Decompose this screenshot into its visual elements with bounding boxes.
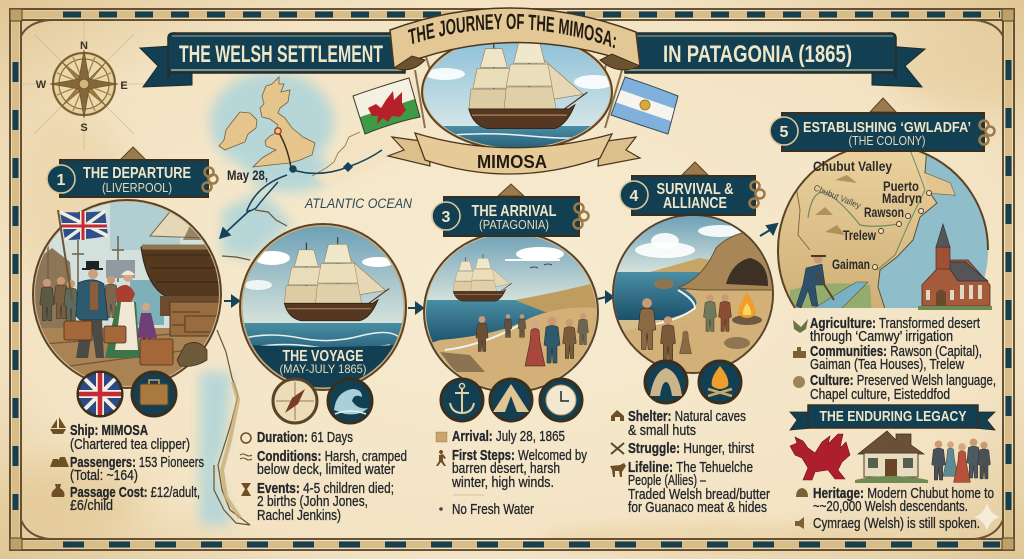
Atlantic Ocean label: ATLANTIC OCEAN xyxy=(304,196,412,211)
icon: cave xyxy=(645,361,687,403)
scene: barren beach xyxy=(424,230,600,395)
title ribbon right xyxy=(625,33,925,87)
step 4 banner: ALLIANCE xyxy=(663,195,727,212)
text: departure facts: Ship: MIMOSA xyxy=(70,423,148,439)
illustration: Welsh house xyxy=(855,431,928,483)
step 3 banner xyxy=(432,184,588,236)
text: departure facts: (Total: ~164) xyxy=(70,468,138,484)
illustration: choir xyxy=(932,439,990,482)
icon: hut glyph xyxy=(611,410,624,421)
watermark sparkle xyxy=(974,503,1000,531)
text: departure facts: (Chartered tea clipper) xyxy=(70,437,190,453)
distant land to the east xyxy=(312,128,410,186)
text: survival facts: for Guanaco meat & hides xyxy=(628,500,767,516)
icon: crossed tools glyph xyxy=(611,443,624,454)
icon: buildings glyph xyxy=(793,347,806,358)
icon: anchor xyxy=(441,379,483,421)
illustration: Welsh dragon xyxy=(790,434,850,480)
text: departure facts: Passage Cost: £12/adult, xyxy=(70,485,200,501)
text: colony facts: through ‘Camwy’ irrigation xyxy=(810,329,953,345)
icon: compass rose: E xyxy=(120,80,128,92)
flag: Wales xyxy=(352,70,426,135)
scene: Liverpool docks xyxy=(30,200,230,390)
panel 3: the arrival xyxy=(424,184,600,518)
step 3 banner: (PATAGONIA) xyxy=(479,218,549,232)
icon: wave xyxy=(328,379,372,423)
step 1 banner: THE DEPARTURE xyxy=(83,165,191,182)
icon: suitcase xyxy=(132,372,176,416)
text: voyage facts: Rachel Jenkins) xyxy=(257,508,341,524)
text: survival facts: People (Allies) – xyxy=(628,473,707,489)
map place labels xyxy=(812,159,932,272)
icon: leaf glyph xyxy=(793,319,808,333)
step 3 banner: 3 xyxy=(442,209,451,226)
icon: ship glyph xyxy=(50,417,66,434)
text: survival facts: Traded Welsh bread/butter xyxy=(628,487,770,503)
text: departure facts xyxy=(50,417,204,514)
text: survival facts: Lifeline: The Tehuelche xyxy=(628,460,753,476)
text: voyage facts: Duration: 61 Days xyxy=(257,430,353,446)
Liverpool marker xyxy=(275,128,281,134)
text: arrival facts: First Steps: Welcomed by xyxy=(452,448,588,464)
icon: compass rose: S xyxy=(80,122,88,134)
icon: compass rose xyxy=(22,22,146,150)
icon: calendar glyph xyxy=(436,432,447,442)
text: survival facts xyxy=(610,409,770,516)
icon: guanaco glyph xyxy=(610,463,626,477)
arrow: step 2 to 3 xyxy=(408,303,423,313)
icon: tent xyxy=(490,379,532,421)
panel 2: the voyage xyxy=(235,224,411,524)
text: voyage facts: below deck, limited water xyxy=(257,462,395,478)
panel 4: survival and alliance xyxy=(610,162,780,516)
icon: speaker glyph xyxy=(795,517,804,529)
text: legacy facts: ~~20,000 Welsh descendants. xyxy=(813,499,968,515)
ribbon: The Enduring Legacy xyxy=(790,405,995,430)
South America coastline xyxy=(214,210,287,525)
icon: heritage dome glyph xyxy=(796,488,808,497)
ribbon: MIMOSA: MIMOSA xyxy=(477,152,547,172)
step 5 banner: ESTABLISHING ‘GWLADFA’ xyxy=(803,120,971,136)
Union flag on pole xyxy=(58,210,72,300)
icon: money bag glyph xyxy=(52,484,64,497)
text: voyage facts: Events: 4-5 children died; xyxy=(257,481,394,497)
text: colony facts: Gaiman (Tea Houses), Trelew xyxy=(810,357,964,373)
voyage label: (MAY-JULY 1865) xyxy=(280,362,367,376)
step 4 banner: 4 xyxy=(630,188,639,205)
ribbon: MIMOSA xyxy=(388,133,640,174)
icon: hourglass glyph xyxy=(241,483,251,496)
text: arrival facts: barren desert, harsh xyxy=(452,461,560,477)
scene: ship at sea xyxy=(235,224,411,395)
step 4 banner xyxy=(620,162,764,215)
central medallion: the Mimosa xyxy=(421,43,613,148)
text: survival facts: Struggle: Hunger, thirst xyxy=(628,441,754,457)
map: Atlantic and continents xyxy=(200,72,412,525)
map place labels: Rawson xyxy=(864,205,904,220)
ribbon: The Enduring Legacy: THE ENDURING LEGACY xyxy=(820,408,966,425)
text: arrival facts: No Fresh Water xyxy=(452,502,534,518)
map place labels: Chubut Valley xyxy=(813,159,892,174)
icon: harp medallion glyph xyxy=(793,376,805,388)
text: voyage facts: Conditions: Harsh, cramped xyxy=(257,449,407,465)
Ireland xyxy=(219,112,257,150)
icon: passengers glyph xyxy=(50,457,69,467)
voyage label xyxy=(280,348,367,376)
ship at quay xyxy=(149,212,200,238)
woman in shawl xyxy=(105,270,140,358)
icon: waves glyph xyxy=(240,454,252,460)
icon: walker glyph xyxy=(436,450,446,466)
child xyxy=(137,303,157,350)
step 5 banner: (THE COLONY) xyxy=(848,134,926,148)
text: arrival facts: winter, high winds. xyxy=(451,475,554,491)
text: voyage facts: 2 births (John Jones, xyxy=(257,494,368,510)
scene: Chubut map with farmer and chapel xyxy=(777,152,992,310)
voyage label: THE VOYAGE xyxy=(282,348,364,365)
panel 1: the departure xyxy=(30,147,230,514)
map place labels: Puerto xyxy=(883,179,919,194)
icon: compass xyxy=(273,379,317,423)
luggage xyxy=(64,321,207,366)
text: colony facts xyxy=(793,316,996,403)
arrow: step 3 to 4 xyxy=(598,292,613,302)
text: colony facts: Communities: Rawson (Capital), xyxy=(810,344,982,360)
scene: cave and campfire xyxy=(612,214,780,375)
panel 5: establishing Gwladfa xyxy=(770,98,1000,532)
text: colony facts: Agriculture: Transformed desert xyxy=(810,316,980,332)
text: arrival facts: Arrival: July 28, 1865 xyxy=(452,429,565,445)
text: survival facts: Shelter: Natural caves xyxy=(628,409,746,425)
banner: The Journey of the Mimosa xyxy=(389,7,641,70)
text: departure facts: Passengers: 153 Pioneers xyxy=(70,455,204,471)
man with top hat xyxy=(76,261,108,358)
step 5 banner: 5 xyxy=(780,124,789,141)
farmer xyxy=(796,254,834,308)
icon: campfire xyxy=(699,361,741,403)
ocean wash around British Isles xyxy=(200,72,334,525)
text: legacy facts: Heritage: Modern Chubut home to xyxy=(813,486,994,502)
text: colony facts: Chapel culture, Eisteddfod xyxy=(810,387,950,403)
text: arrival facts xyxy=(436,429,588,518)
map place labels: Trelew xyxy=(843,228,876,243)
text: legacy facts: Cymraeg (Welsh) is still spoken. xyxy=(813,516,980,532)
chapel xyxy=(918,224,992,310)
crowd xyxy=(40,276,118,322)
banner: The Journey of the Mimosa: THE JOURNEY OF THE MIMOSA: xyxy=(408,14,616,48)
text: voyage facts xyxy=(240,430,407,524)
step 4 banner: SURVIVAL & xyxy=(656,181,734,198)
icon: compass rose: N xyxy=(80,40,88,52)
step 1 banner: (LIVERPOOL) xyxy=(102,181,172,195)
step 1 banner: 1 xyxy=(57,172,66,189)
step 5 banner xyxy=(770,98,994,151)
title ribbon left: THE WELSH SETTLEMENT xyxy=(179,41,383,68)
arrow: step 4 to 5 xyxy=(760,224,777,236)
text: legacy facts xyxy=(795,486,994,532)
map place labels: Madryn xyxy=(882,191,922,206)
Great Britain xyxy=(253,77,315,167)
text: departure facts: £6/child xyxy=(70,498,113,514)
step 3 banner: THE ARRIVAL xyxy=(472,203,556,220)
title ribbon right: IN PATAGONIA (1865) xyxy=(663,41,852,68)
arrow: step 1 to 2 xyxy=(224,296,239,306)
icon: stopwatch glyph xyxy=(241,433,251,443)
date label: May 28, xyxy=(227,168,268,183)
step 1 banner xyxy=(47,147,218,197)
title ribbon left xyxy=(140,33,405,87)
text: survival facts: & small huts xyxy=(628,423,696,439)
icon: clock xyxy=(540,379,582,421)
map place labels: Gaiman xyxy=(832,257,870,272)
icon: union flag xyxy=(78,372,122,416)
flag: Argentina xyxy=(604,70,679,135)
icon: compass rose: W xyxy=(36,79,47,91)
route lines xyxy=(220,131,382,238)
map place labels: Chubut Valley xyxy=(812,183,863,211)
